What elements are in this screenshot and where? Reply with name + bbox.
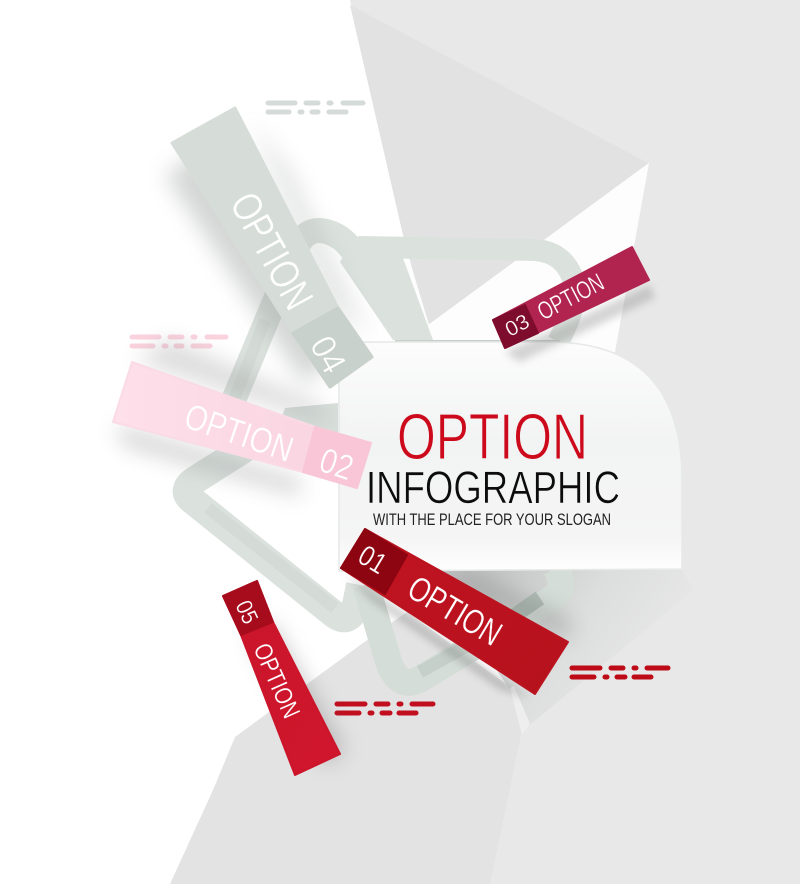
label text 05: OPTION xyxy=(248,639,305,723)
label text 05: 05 xyxy=(230,596,264,628)
label text 05 xyxy=(230,596,305,723)
label text 01: OPTION xyxy=(401,568,509,654)
label text 03 xyxy=(500,268,609,343)
shadow under red tab xyxy=(440,578,570,640)
dashes: red lower xyxy=(337,704,433,713)
label 04: grey tab xyxy=(165,108,372,387)
slogan: WITH THE PLACE FOR YOUR SLOGAN xyxy=(373,511,611,529)
dashes: grey xyxy=(268,103,363,112)
label text 03: 03 xyxy=(502,310,533,342)
label text 02: OPTION xyxy=(179,395,299,470)
label 05: red tab xyxy=(223,581,345,775)
dashes: red right xyxy=(572,668,668,677)
label text 02: 02 xyxy=(315,441,358,488)
panel: central title card xyxy=(339,341,682,571)
label text 03: OPTION xyxy=(533,268,609,326)
label 03: crimson tab xyxy=(493,247,655,362)
dashes: pink xyxy=(132,337,226,346)
title: INFOGRAPHIC: INFOGRAPHIC xyxy=(366,462,620,513)
label text 01 xyxy=(352,540,509,654)
label text 04: OPTION xyxy=(221,184,323,317)
label text 04: 04 xyxy=(302,330,354,380)
title: OPTION: OPTION xyxy=(397,400,588,473)
arrow outline: looping green-grey ribbon xyxy=(187,231,575,682)
label 02: pink tab xyxy=(113,340,371,495)
label text 01: 01 xyxy=(352,540,392,581)
label 01: red tab xyxy=(341,529,568,698)
